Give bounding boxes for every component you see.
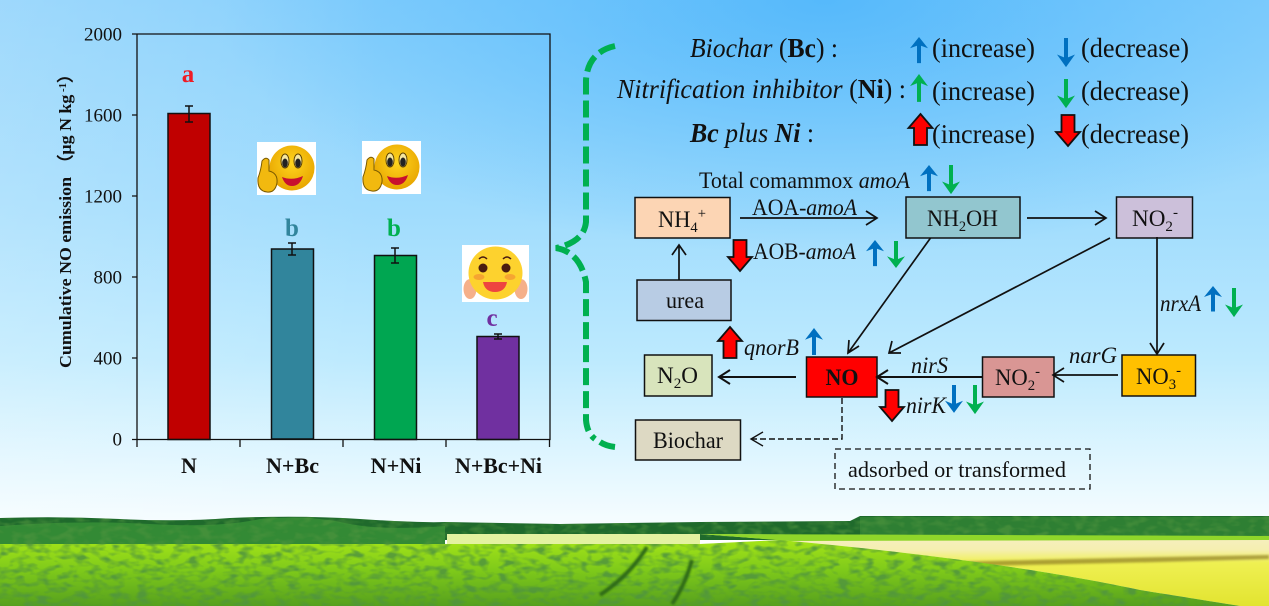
significance letters: b xyxy=(387,215,401,242)
gene labels: qnorB xyxy=(744,335,799,360)
error bars xyxy=(185,106,502,339)
bar: N+Bc+Ni xyxy=(477,336,519,440)
box: NO2- pink: NO xyxy=(995,365,1028,390)
box: NO red xyxy=(806,357,877,397)
legend row: biochar: (increase) xyxy=(932,33,1035,63)
dashed arrow head xyxy=(751,432,763,446)
y axis tick labels: 800 xyxy=(94,268,122,288)
icon: hugging emoji xyxy=(462,245,529,302)
x axis labels: N+Ni xyxy=(370,453,422,478)
box: NH4+ xyxy=(635,198,730,238)
legend row: nitrification inhibitor xyxy=(616,74,1189,108)
significance letters: c xyxy=(486,305,498,332)
icon: thumbs up emoji 2 xyxy=(362,141,421,194)
significance letters: a xyxy=(182,61,195,88)
gene labels: narG xyxy=(1069,343,1117,368)
box: NO2- purple: NO xyxy=(1132,206,1165,231)
legend row: nitrification inhibitor: Nitrification inhibitor (Ni) : xyxy=(616,74,906,104)
x axis labels: N xyxy=(181,453,197,478)
y axis title: Cumulative NO emission （μg N kg xyxy=(56,116,75,368)
bar: N+Ni xyxy=(374,256,416,440)
box: NH4+: 4 xyxy=(690,220,698,236)
box: NH4+: + xyxy=(698,206,706,222)
box: NH2OH: 2 xyxy=(959,219,966,235)
box: NO2- purple xyxy=(1116,197,1192,238)
y axis tick labels: 2000 xyxy=(84,24,122,46)
box: adsorbed or transformed xyxy=(835,449,1090,489)
y axis tick labels: 1600 xyxy=(84,106,122,126)
regulation arrows: total comammox amoA xyxy=(920,165,960,194)
legend row: biochar: (decrease) xyxy=(1081,33,1189,63)
legend row: nitrification inhibitor: (increase) xyxy=(932,76,1035,106)
box: NO2- purple: 2 xyxy=(1165,219,1173,235)
box: N2O xyxy=(644,355,712,396)
gene labels: nirK xyxy=(906,393,948,418)
box: NH4+: NH xyxy=(658,207,691,232)
legend: treatments and arrows xyxy=(616,33,1189,149)
y axis tick labels: 1200 xyxy=(84,186,122,208)
gene labels: nirS xyxy=(911,353,948,378)
box: NH2OH xyxy=(906,197,1020,238)
x axis labels: N+Bc xyxy=(266,453,319,478)
y axis title: -1 xyxy=(58,83,69,95)
box: N2O: 2 xyxy=(674,376,681,392)
background: farmland xyxy=(0,516,1269,606)
box: NO2- pink xyxy=(982,357,1054,397)
box: NO red: NO xyxy=(826,365,858,390)
box: adsorbed or transformed: adsorbed or transformed xyxy=(848,457,1066,482)
box: Biochar: Biochar xyxy=(653,428,723,453)
box: N2O: O xyxy=(681,363,698,388)
regulation arrows: qnorB xyxy=(718,327,823,358)
gene labels: AOB-amoA xyxy=(753,239,857,264)
pathway diagram: nitrogen cycle xyxy=(635,165,1243,489)
box: NO3-: NO xyxy=(1136,364,1169,389)
legend row: Bc plus Ni xyxy=(689,114,1189,149)
legend row: biochar: Biochar (Bc) : xyxy=(690,33,838,63)
box: NO2- pink: 2 xyxy=(1028,378,1035,394)
gene labels: nrxA xyxy=(1160,291,1202,316)
y axis tick labels xyxy=(84,24,122,450)
box: N2O: N xyxy=(657,363,674,388)
dashed arrow: NO to biochar xyxy=(752,398,842,439)
y axis title: ） xyxy=(55,65,75,83)
legend row: Bc plus Ni: (decrease) xyxy=(1081,119,1189,149)
plot frame and ticks xyxy=(132,34,550,447)
regulation arrows: nirK xyxy=(880,385,984,421)
box: NO3- xyxy=(1122,355,1196,396)
legend row: Bc plus Ni: Bc plus Ni : xyxy=(689,118,814,148)
bar chart: cumulative NO emission xyxy=(55,24,550,478)
gene labels xyxy=(699,168,1202,418)
gene labels: Total comammox amoA xyxy=(699,168,911,193)
bar: N+Bc xyxy=(272,249,314,439)
legend row: nitrification inhibitor: (decrease) xyxy=(1081,76,1189,106)
solid pathway arrows xyxy=(672,211,1164,384)
gene labels: AOA-amoA xyxy=(752,195,858,220)
y axis tick labels: 0 xyxy=(112,430,122,450)
box: NH2OH: OH xyxy=(966,206,998,231)
box: Biochar xyxy=(636,420,740,460)
x axis labels xyxy=(181,453,542,478)
legend row: biochar xyxy=(690,33,1189,67)
box: NO2- purple: - xyxy=(1173,205,1178,221)
icon: thumbs up emoji 1 xyxy=(257,142,316,195)
box: NO2- pink: - xyxy=(1035,364,1040,380)
significance letters: b xyxy=(285,215,299,242)
significance letters xyxy=(182,61,498,332)
bar: N xyxy=(168,114,210,440)
legend row: Bc plus Ni: (increase) xyxy=(932,119,1035,149)
box: NH2OH: NH xyxy=(927,206,960,231)
box: NO3-: - xyxy=(1176,363,1181,379)
box: urea xyxy=(637,280,731,320)
regulation arrows: nrxA xyxy=(1204,286,1243,317)
y axis tick labels: 400 xyxy=(94,348,122,370)
regulation arrows: AOB-amoA xyxy=(728,240,905,271)
box: NO3-: 3 xyxy=(1169,377,1176,393)
x axis labels: N+Bc+Ni xyxy=(455,453,542,478)
box: urea: urea xyxy=(666,288,704,313)
brace: green dashed xyxy=(556,46,615,447)
